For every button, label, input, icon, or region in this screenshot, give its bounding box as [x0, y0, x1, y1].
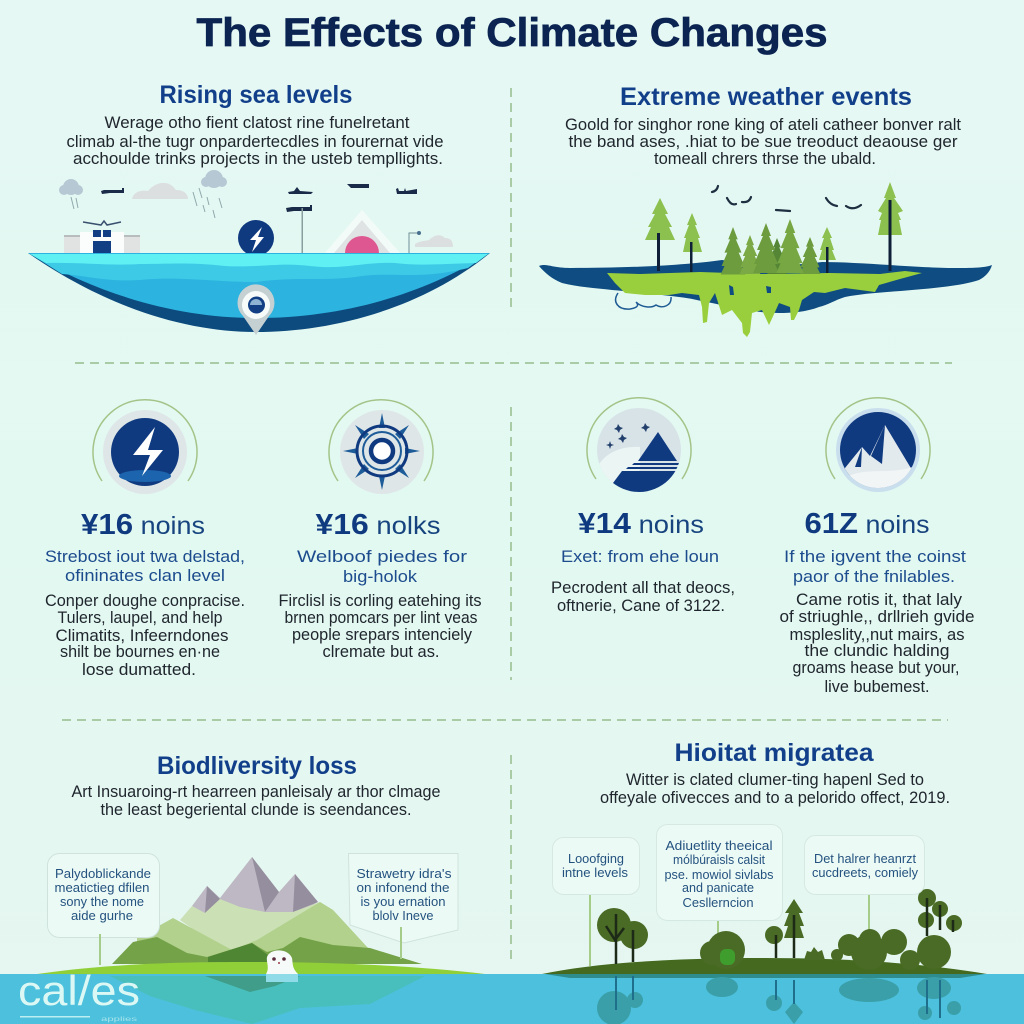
- map pin marker: [238, 284, 274, 335]
- logo: cal/es: [18, 967, 140, 1014]
- callout: right: [348, 854, 458, 959]
- text block: rising sea levels: climab al-the tugr onpardertecdles in fourernat vide: [66, 133, 444, 151]
- icon: snowy mountains badge: [826, 398, 930, 495]
- tree trunks: [606, 898, 953, 964]
- callout: right: Strawetry idra's: [356, 867, 452, 881]
- callout: right: is you ernation: [360, 895, 446, 909]
- stat value: 61Z noins: [804, 508, 930, 540]
- subheading: [784, 548, 966, 586]
- callout: centre: mólbúraisls calsit: [673, 853, 766, 867]
- body text: lose dumatted.: [82, 661, 196, 679]
- text block: rising sea levels: [66, 114, 444, 168]
- callout: right: on infonend the: [356, 881, 450, 895]
- callout: right: Det halrer heanrzt: [814, 852, 917, 866]
- callout: left: [552, 838, 640, 894]
- logo: applies: [101, 1017, 137, 1023]
- panel: stat three: [551, 398, 735, 615]
- body text: Tulers, laupel, and help: [58, 609, 222, 627]
- subheading: paor of the fnilables.: [793, 568, 955, 586]
- body text: [278, 592, 482, 661]
- body text: [551, 579, 735, 615]
- panel: stat two: [278, 400, 482, 661]
- body text: Firclisl is corling eatehing its: [278, 592, 482, 610]
- body text: Came rotis it, that laly: [796, 591, 963, 609]
- callout: left: Looofging: [568, 852, 624, 866]
- body text: [45, 592, 245, 679]
- icon: moon and peak badge: [587, 398, 691, 495]
- callout: centre: Cesllerncion: [682, 896, 754, 910]
- body text: Pecrodent all that deocs,: [551, 579, 735, 597]
- text block: habitat migration: [600, 771, 950, 807]
- water strip with reflections: [0, 974, 1024, 1024]
- seal: [266, 950, 298, 974]
- heading: extreme weather events: Extreme weather events: [620, 83, 912, 111]
- illustration: wooded island: [542, 824, 987, 974]
- illustration: floating forest island: [539, 182, 992, 337]
- body text: shilt be bournes en·ne: [60, 643, 220, 661]
- right cloud and signal post: [409, 231, 453, 253]
- body text: clremate but as.: [322, 643, 440, 661]
- text block: extreme weather events: Goold for singhor rone king of ateli catheer bonver ralt: [565, 116, 961, 134]
- icon: compass rings badge: [329, 400, 433, 494]
- subheading: big-holok: [343, 568, 418, 586]
- callout: centre: and panicate: [682, 881, 754, 895]
- panel: habitat migration: [542, 739, 987, 974]
- stat value: ¥16 nolks: [316, 509, 440, 541]
- text block: extreme weather events: [565, 116, 961, 168]
- subheading: Strebost iout twa delstad,: [45, 548, 245, 566]
- woodland: [542, 889, 987, 974]
- illustration: flooded bowl of water: [28, 170, 490, 335]
- panel: extreme weather events: [539, 83, 992, 337]
- text block: rising sea levels: acchoulde trinks projects in the usteb templlights.: [73, 150, 443, 168]
- heading: habitat migration: Hioitat migratea: [674, 739, 875, 767]
- callout: centre: pse. mowiol sivlabs: [664, 868, 774, 882]
- heading: biodiversity loss: Biodliversity loss: [157, 752, 357, 780]
- coastal building: [64, 221, 140, 253]
- panel: rising sea levels: [28, 81, 490, 335]
- text block: habitat migration: Witter is clated clumer-ting hapenl Sed to: [626, 771, 924, 789]
- subheading: Exet: from ehe loun: [561, 548, 719, 566]
- callout: right: blolv Ineve: [372, 909, 434, 923]
- panel: biodiversity loss: [37, 752, 485, 974]
- island base: [539, 260, 992, 313]
- leader lines: [590, 890, 869, 966]
- body text: brnen pomcars per lint veas: [284, 609, 478, 627]
- icon: lightning stat badge: [93, 400, 197, 494]
- subheading: ofininates clan level: [65, 567, 225, 585]
- icon: lightning bolt: [238, 220, 274, 256]
- body text: mspleslity,,nut mairs, as: [790, 626, 964, 644]
- text block: rising sea levels: Werage otho fient clatost rine funelretant: [104, 114, 410, 132]
- water body: [28, 253, 490, 332]
- subheading: If the igvent the coinst: [784, 548, 966, 566]
- callout: centre: [656, 824, 782, 920]
- text block: biodiversity loss: [72, 783, 440, 819]
- subheading: Welboof piedes for: [297, 548, 468, 566]
- panel: stat four: [780, 398, 974, 696]
- body text: oftnerie, Cane of 3122.: [557, 597, 725, 615]
- callout: left: Palydoblickande: [55, 867, 151, 881]
- text block: extreme weather events: tomeall chrers thrse the ubald.: [654, 150, 876, 168]
- body text: people srepars intenciely: [292, 626, 473, 644]
- cloud outline: [616, 293, 671, 309]
- subheading: [297, 548, 468, 586]
- small water gaps in the moss: [729, 285, 771, 295]
- moss layer with drips: [607, 271, 922, 337]
- callout: right: cucdreets, comiely: [812, 866, 919, 880]
- utility pole: [302, 208, 303, 253]
- text block: habitat migration: offeyale ofivecces and to a pelorido offect, 2019.: [600, 789, 950, 807]
- text block: biodiversity loss: the least begeriental clunde is seendances.: [100, 801, 412, 819]
- body text: Conper doughe conpracise.: [45, 592, 245, 610]
- highlight shrub: [720, 949, 735, 965]
- body text: of striughle,, drllrieh gvide: [780, 608, 974, 626]
- stat value: ¥14 noins: [578, 508, 704, 540]
- callout: left: aide gurhe: [71, 909, 133, 923]
- title: The Effects of Climate Changes: [196, 11, 828, 55]
- body text: groams hease but your,: [792, 659, 960, 677]
- birds: [712, 186, 861, 211]
- body text: live bubemest.: [824, 678, 930, 696]
- callout: left: sony the nome: [60, 895, 144, 909]
- small aircraft silhouettes: [101, 184, 417, 212]
- body text: the clundic halding: [804, 642, 950, 660]
- body text: Climatits, Infeerndones: [56, 627, 228, 645]
- text block: extreme weather events: the band ases, .hiat to be sue treoduct deaouse ger: [568, 133, 958, 151]
- tall pines: [645, 182, 903, 273]
- illustration: mountains and seal: [37, 854, 485, 974]
- mountains: [112, 857, 422, 964]
- ground strip: [37, 962, 485, 974]
- callout: left: intne levels: [562, 866, 628, 880]
- callout: centre: Adiuetlity theeical: [666, 839, 772, 853]
- panel: stat one: [45, 400, 245, 679]
- text block: biodiversity loss: Art Insuaroing-rt hearreen panleisaly ar thor clmage: [72, 783, 440, 801]
- house with pink dome: [325, 210, 400, 253]
- stat value: ¥16 noins: [81, 509, 205, 541]
- callout: left: [48, 854, 160, 965]
- body text: [780, 591, 974, 696]
- central spruce cluster: [721, 219, 820, 274]
- callout: right: [804, 836, 924, 894]
- subheading: [45, 548, 245, 585]
- heading: rising sea levels: Rising sea levels: [160, 81, 352, 109]
- callout: left: meatictieg dfilen: [54, 881, 150, 895]
- weather clouds and rain: [59, 170, 227, 218]
